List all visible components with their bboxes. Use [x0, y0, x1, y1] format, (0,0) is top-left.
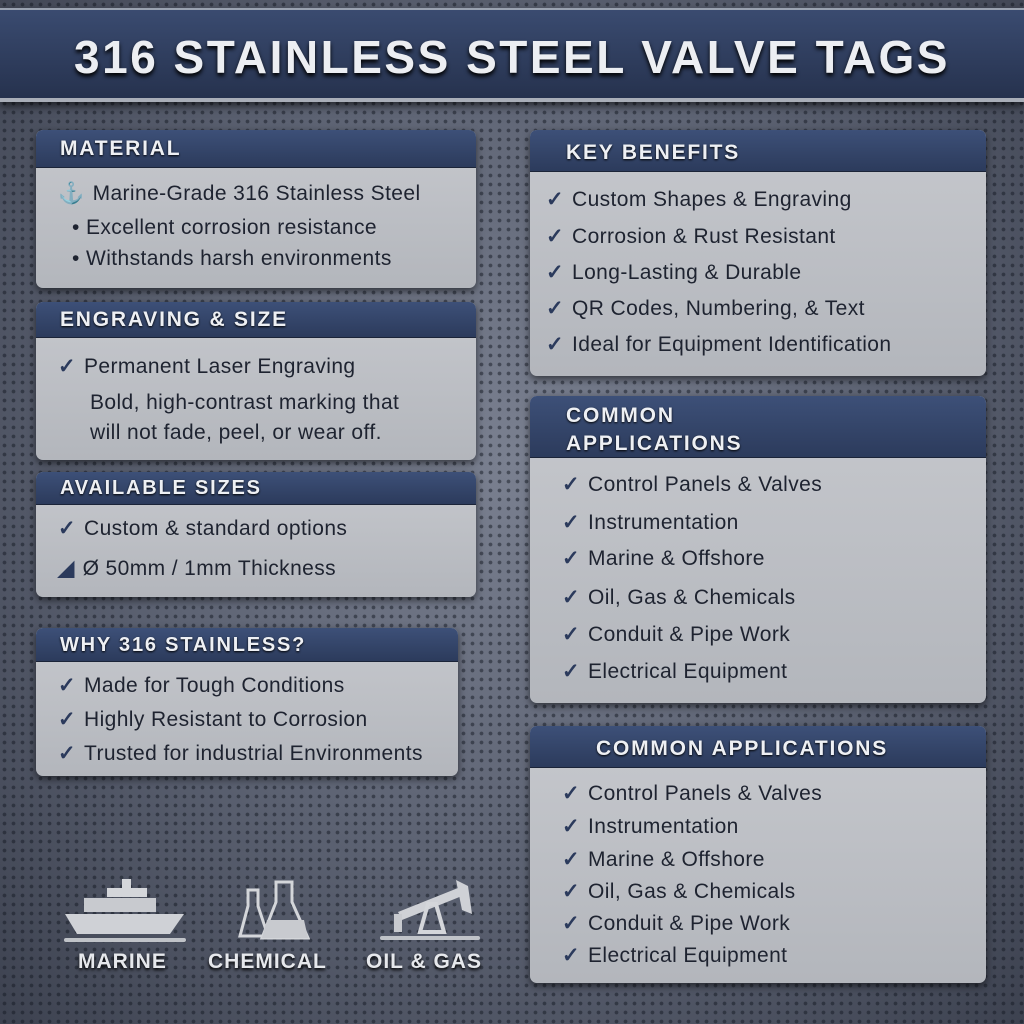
panel: available sizes: AVAILABLE SIZES [60, 477, 262, 499]
panel: common applications 2: ✓ Electrical Equipment [562, 944, 787, 967]
panel: common applications 2: COMMON APPLICATIONS [596, 737, 888, 760]
icon: flasks [238, 880, 310, 940]
panel: common applications 2: ✓ Control Panels & Valves [562, 782, 822, 805]
panel: why 316: WHY 316 STAINLESS? [60, 634, 306, 656]
panel: engraving & size: ✓ Permanent Laser Engraving [58, 355, 356, 378]
panel: available sizes: ✓ Custom & standard options [58, 517, 347, 540]
panel: common applications 2 [530, 726, 986, 983]
panel: common applications 1: ✓ Marine & Offshore [562, 547, 765, 570]
panel: common applications 2: ✓ Oil, Gas & Chemicals [562, 880, 796, 903]
panel: common applications 1: ✓ Conduit & Pipe Work [562, 623, 790, 646]
icon: oil pump [380, 880, 480, 940]
panel: engraving & size: ENGRAVING & SIZE [60, 308, 288, 331]
panel: common applications 2: ✓ Conduit & Pipe Work [562, 912, 790, 935]
panel: key benefits: ✓ Custom Shapes & Engraving [546, 188, 852, 211]
panel: why 316: ✓ Made for Tough Conditions [58, 674, 345, 697]
panel: engraving & size: Bold, high-contrast marking that [90, 391, 399, 414]
panel: material: MATERIAL [60, 137, 181, 160]
panel: engraving & size [36, 302, 476, 460]
panel: why 316: ✓ Trusted for industrial Environments [58, 742, 423, 765]
panel: common applications 2: ✓ Marine & Offshore [562, 848, 765, 871]
panel: key benefits: ✓ QR Codes, Numbering, & Text [546, 297, 865, 320]
label: marine: MARINE [78, 950, 167, 973]
label: oil & gas: OIL & GAS [366, 950, 482, 973]
panel: material: • Excellent corrosion resistance [72, 216, 377, 239]
panel: common applications 2: ✓ Instrumentation [562, 815, 739, 838]
panel: material: • Withstands harsh environments [72, 247, 392, 270]
title banner [0, 8, 1024, 102]
panel: common applications 1: COMMON [566, 404, 675, 427]
panel: key benefits: KEY BENEFITS [566, 141, 740, 164]
panel: common applications 1: ✓ Control Panels & Valves [562, 473, 822, 496]
panel: available sizes: ◢ Ø 50mm / 1mm Thickness [58, 557, 336, 580]
panel: common applications 1: ✓ Electrical Equipment [562, 660, 787, 683]
panel: key benefits: ✓ Long-Lasting & Durable [546, 261, 801, 284]
panel: common applications 1: ✓ Oil, Gas & Chemicals [562, 586, 796, 609]
anchor item: ⚓ Marine-Grade 316 Stainless Steel [58, 182, 421, 205]
panel: key benefits: ✓ Corrosion & Rust Resistant [546, 225, 836, 248]
panel: material [36, 130, 476, 288]
label: chemical: CHEMICAL [208, 950, 327, 973]
panel: engraving & size: will not fade, peel, or wear off. [90, 421, 382, 444]
panel: key benefits: ✓ Ideal for Equipment Identification [546, 333, 891, 356]
panel: why 316 [36, 628, 458, 776]
title: 316 STAINLESS STEEL VALVE TAGS [74, 31, 950, 83]
panel: common applications 1: APPLICATIONS [566, 432, 742, 455]
panel: why 316: ✓ Highly Resistant to Corrosion [58, 708, 368, 731]
icon: ship [64, 879, 186, 942]
panel: common applications 1 [530, 396, 986, 703]
panel: available sizes [36, 472, 476, 597]
panel: common applications 1: ✓ Instrumentation [562, 511, 739, 534]
panel: key benefits [530, 130, 986, 376]
